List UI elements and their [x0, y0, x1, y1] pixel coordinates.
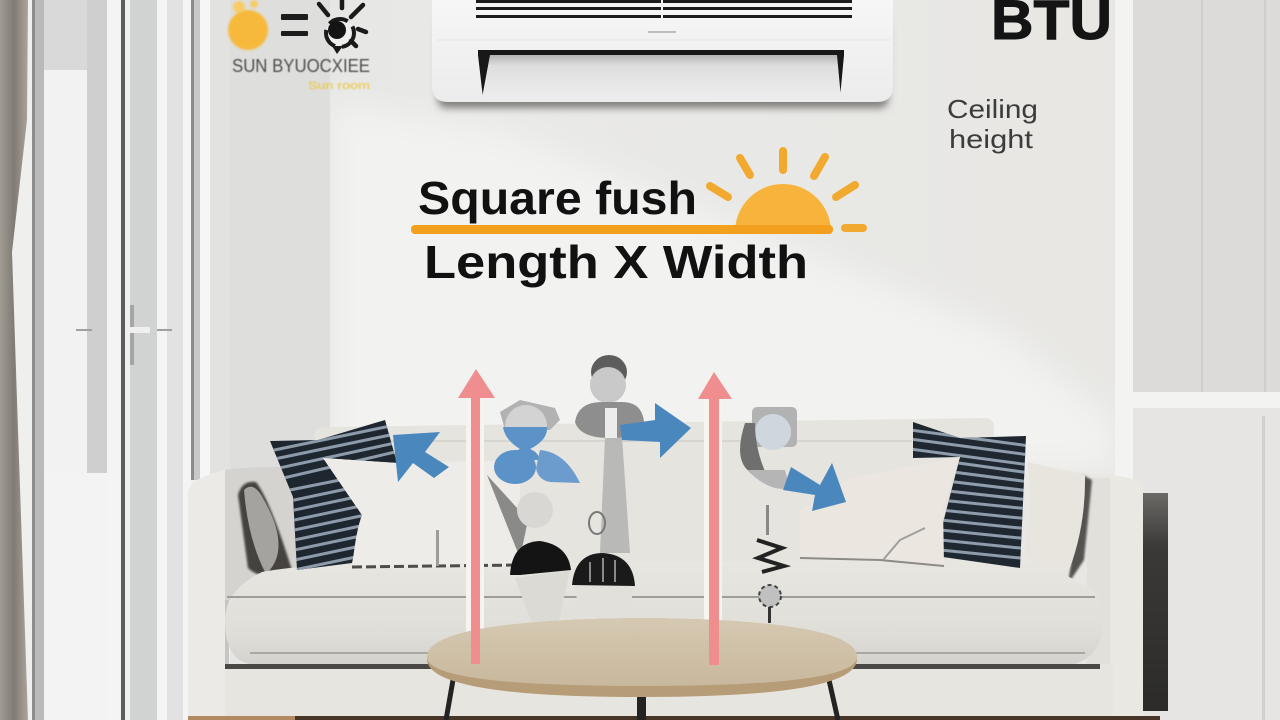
formula: length x width: Length X Width	[424, 236, 808, 288]
blue arrow up-left	[393, 432, 449, 482]
sofa right arm	[1060, 470, 1143, 716]
striped pillow right	[910, 422, 1030, 568]
pink arrow left	[458, 369, 495, 664]
beige side cushion right	[1024, 462, 1092, 584]
formula caption	[232, 56, 370, 92]
heading: square footage: Square fush	[418, 172, 697, 224]
floor	[188, 716, 1160, 720]
pink arrow right	[698, 372, 732, 665]
icon: black sun bulb	[319, 0, 366, 54]
sofa	[188, 418, 1143, 716]
striped pillow left	[265, 420, 397, 572]
equals sign	[281, 14, 308, 36]
sofa back	[315, 418, 994, 575]
sun graphic with rays	[710, 151, 863, 232]
formula caption: SUN BYUOCXIEE	[232, 56, 370, 76]
pink up arrows	[458, 369, 732, 665]
formula caption: Sun room	[308, 80, 370, 92]
blue arrow right	[620, 403, 691, 458]
dark vases	[487, 475, 635, 636]
window and curtain	[0, 0, 230, 720]
blue arrows	[393, 403, 846, 511]
ceiling height label: Ceiling	[947, 94, 1038, 124]
air conditioner unit	[432, 0, 893, 108]
seat cushion	[225, 560, 1102, 664]
cream pillow right	[800, 457, 960, 566]
sofa left arm	[188, 467, 300, 716]
coffee table	[427, 618, 857, 720]
person figure left	[494, 400, 580, 484]
people and vases cluster	[487, 355, 797, 636]
cream pillow left	[323, 458, 520, 568]
sofa wall shadow	[1143, 493, 1168, 711]
right wall panels	[1115, 0, 1280, 720]
orange underline	[411, 225, 833, 234]
formula icons: sun equals bulb	[228, 0, 366, 54]
sofa base	[225, 664, 1113, 716]
ceiling height label: height	[949, 124, 1034, 154]
ceiling height label	[947, 94, 1038, 154]
decorative stem	[757, 505, 784, 623]
person figure right	[740, 407, 797, 489]
icon: orange sun	[228, 0, 268, 50]
arrow bases over table	[471, 618, 480, 664]
grey side cushion	[238, 482, 292, 576]
person figure center	[575, 355, 644, 553]
blue arrow down-right	[783, 463, 846, 511]
